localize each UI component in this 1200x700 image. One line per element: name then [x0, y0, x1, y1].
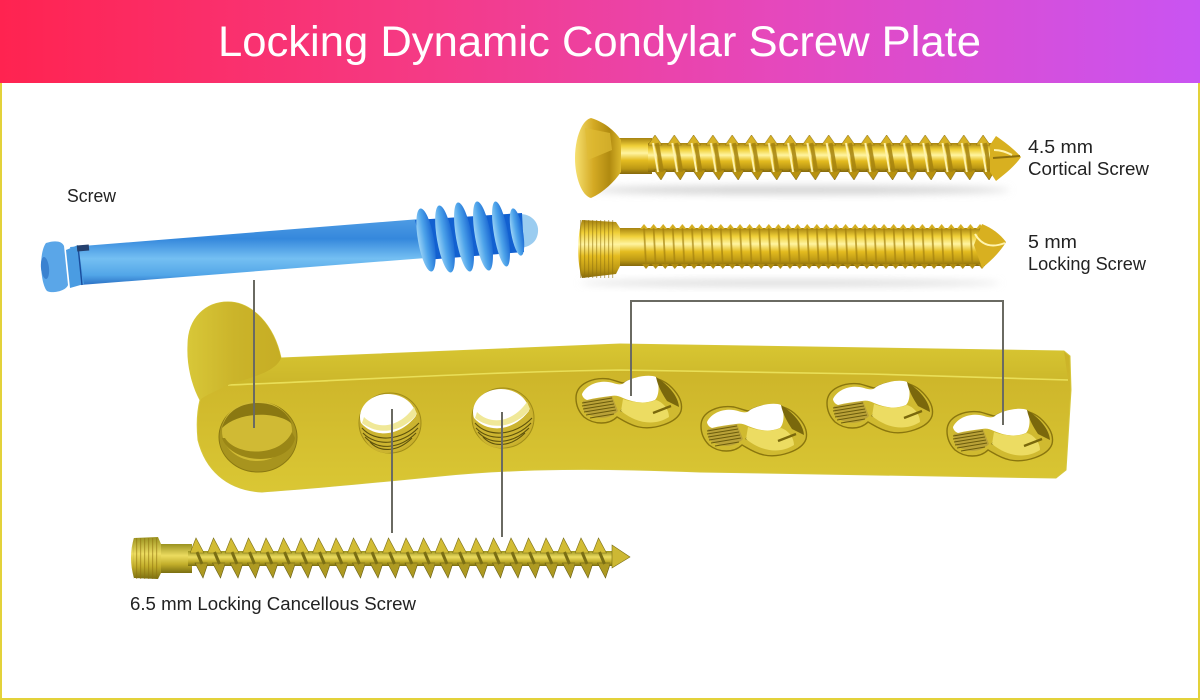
- nub hole: [219, 401, 297, 472]
- bracket: locking and cortical screws to combi holes: [631, 301, 1003, 425]
- leader line: threaded hole 2 to cancellous screw: [501, 412, 503, 537]
- label: Screw: Screw: [67, 186, 117, 206]
- screw head: [575, 118, 621, 198]
- leader line: blue screw to nub hole: [253, 280, 255, 428]
- threaded hole 2: [472, 388, 534, 448]
- 5 mm locking screw: [578, 220, 1006, 286]
- locking plate: [188, 302, 1071, 492]
- label: 6.5 mm Locking Cancellous Screw: 6.5 mm Locking Cancellous Screw: [130, 594, 417, 614]
- plate top bevel: [228, 344, 1068, 385]
- 6.5 mm locking cancellous screw: [131, 537, 630, 579]
- blue screw: [40, 200, 538, 292]
- screw head: [578, 220, 620, 278]
- screw head: [131, 537, 161, 579]
- leader line: threaded hole 1 to cancellous screw: [391, 409, 393, 533]
- label: 5 mm Locking Screw: 5 mm: [1028, 232, 1077, 252]
- combi hole 4: [947, 409, 1052, 461]
- label: 5 mm Locking Screw: Locking Screw: [1028, 254, 1147, 274]
- combi hole 3: [827, 381, 932, 433]
- label: 4.5 mm Cortical Screw: 4.5 mm: [1028, 137, 1093, 157]
- combi hole 2: [701, 404, 806, 456]
- blue screw threads: [413, 200, 527, 274]
- header banner: [0, 0, 1200, 83]
- 4.5 mm cortical screw: [575, 118, 1021, 198]
- threaded hole 1: [359, 393, 421, 453]
- label: 4.5 mm Cortical Screw: Cortical Screw: [1028, 159, 1150, 179]
- combi hole 1: [576, 376, 682, 428]
- plate nub: [188, 302, 281, 400]
- title: Locking Dynamic Condylar Screw Plate: [218, 18, 981, 66]
